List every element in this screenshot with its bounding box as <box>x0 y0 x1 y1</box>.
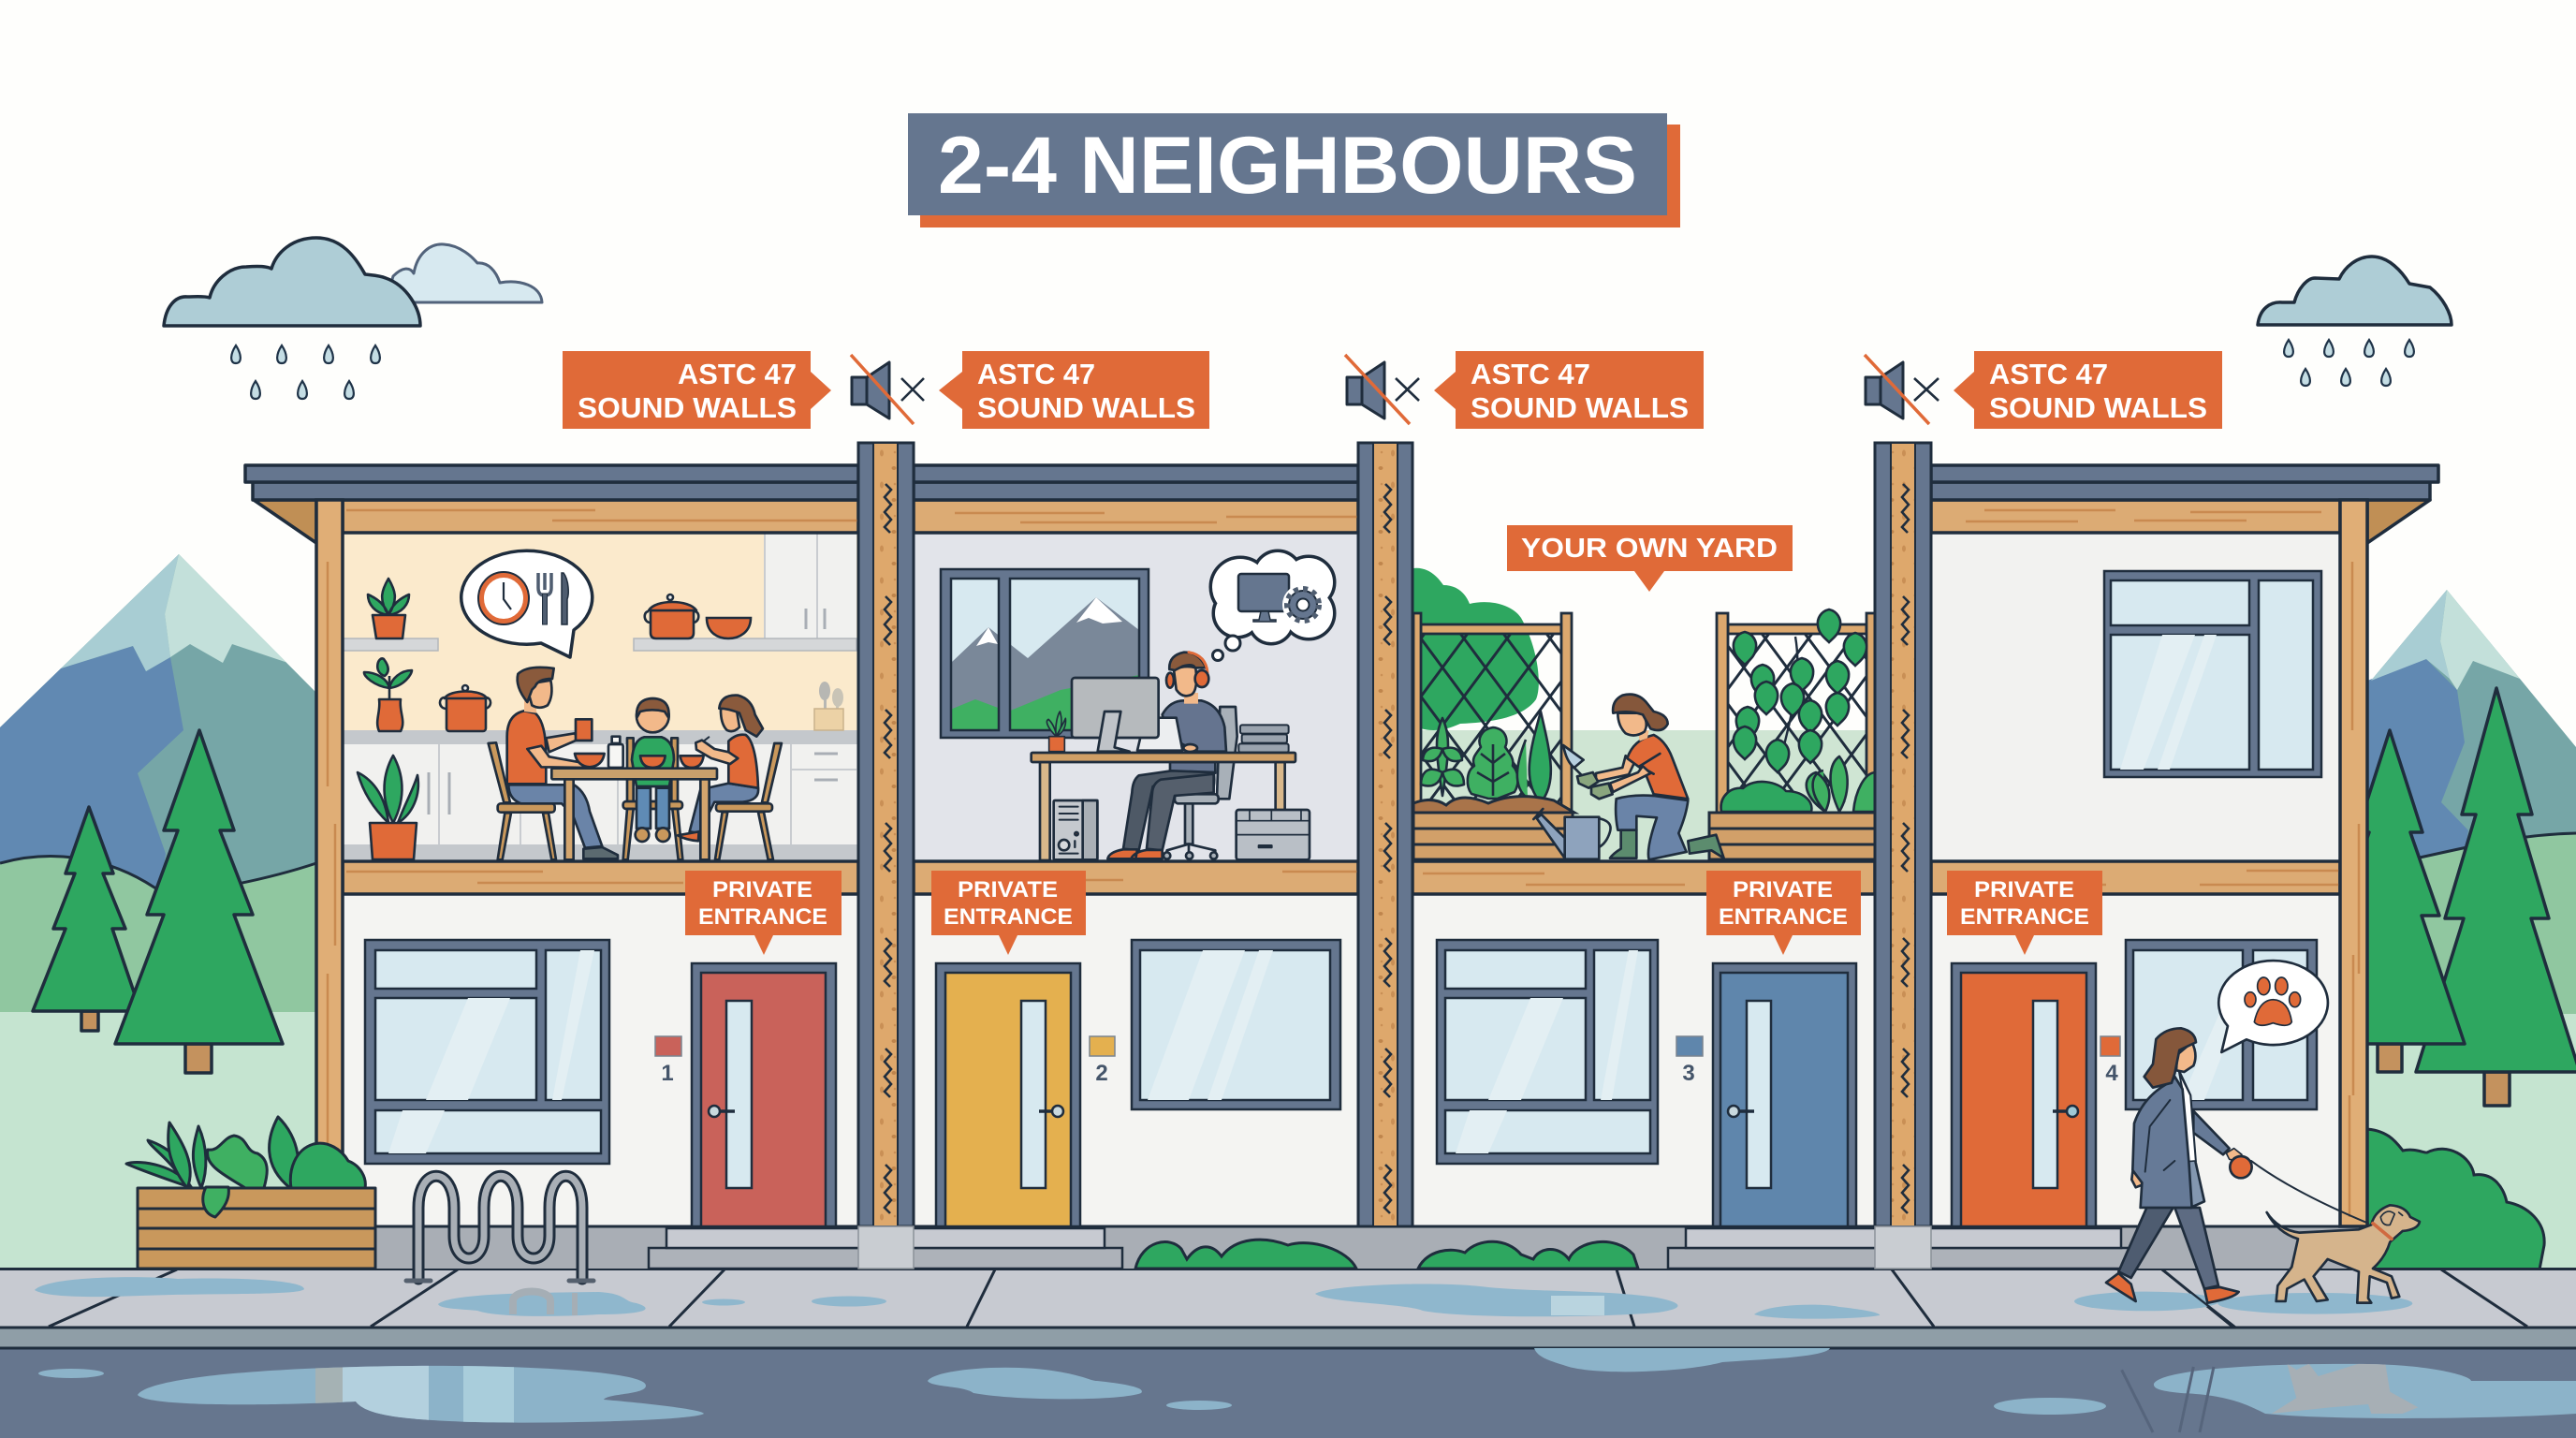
label: your own yard: YOUR OWN YARD <box>1521 534 1778 564</box>
thought bubble: computer and gear <box>1212 552 1333 661</box>
chair: woman <box>715 743 782 859</box>
label: private entrance 1: ENTRANCE <box>698 904 827 930</box>
window: unit 2 ground floor <box>1132 940 1340 1109</box>
unit 4 upper: blank wall with window <box>1931 533 2340 859</box>
monitor <box>1072 678 1159 752</box>
bush: foundation shrub 2 <box>1418 1241 1638 1269</box>
speech bubble: paw <box>2218 961 2328 1052</box>
icon: cooking pot on counter <box>440 685 490 731</box>
landscape: right mountains and hills <box>2364 590 2576 1271</box>
address plate 3: 3 <box>1682 1061 1695 1086</box>
family at table <box>489 668 782 859</box>
window: unit 4 ground floor <box>2126 940 2317 1109</box>
puddle under walker <box>2074 1292 2412 1314</box>
shelf: right <box>634 638 856 651</box>
foundation band <box>375 1226 2364 1269</box>
label: ASTC 47 sound walls, fourth <box>1954 351 2222 429</box>
label: ASTC 47 sound walls, left <box>563 351 831 429</box>
icon: utensil jar <box>814 682 843 730</box>
laptop <box>1137 718 1182 751</box>
shelf: left <box>343 638 438 651</box>
man <box>507 668 618 858</box>
child <box>632 698 674 842</box>
icon: muted speaker 2 <box>1345 355 1419 424</box>
entry steps, units 1 and 2 <box>649 1228 1122 1269</box>
tree: large left <box>115 730 283 1073</box>
kneeling figure <box>1563 695 1724 859</box>
address plate 2: 2 <box>1095 1061 1108 1086</box>
window: unit 1 ground floor <box>365 940 609 1164</box>
icon: pot on shelf <box>645 594 698 638</box>
address plate 3 <box>1676 1036 1703 1086</box>
label: private entrance 1: PRIVATE <box>712 877 812 902</box>
party wall 1 with sound insulation <box>858 443 914 1269</box>
label: ASTC 47 sound walls, left: SOUND WALLS <box>578 391 797 424</box>
label: ASTC 47 sound walls, second: ASTC 47 <box>977 358 1095 390</box>
bike rack <box>406 1176 593 1281</box>
sidewalk joint over puddle <box>2162 1270 2235 1328</box>
speech bubble: meal time <box>461 550 593 657</box>
title banner <box>908 113 1680 227</box>
address plate 4: 4 <box>2105 1061 2118 1086</box>
label: private entrance 3 <box>1706 871 1861 955</box>
torso and head <box>1107 653 1226 858</box>
tree: small left <box>33 807 140 1031</box>
dining table <box>551 769 717 859</box>
label: ASTC 47 sound walls, third: SOUND WALLS <box>1471 391 1689 424</box>
label: private entrance 1 <box>685 871 842 955</box>
ground floor wall <box>343 894 2340 1226</box>
chair <box>1164 707 1237 859</box>
watering can <box>1533 809 1611 859</box>
climbing vine <box>1734 609 1866 772</box>
door: unit 3 blue <box>1713 963 1856 1226</box>
dog <box>2267 1205 2420 1303</box>
label: ASTC 47 sound walls, fourth: ASTC 47 <box>1989 358 2108 390</box>
desk <box>1032 753 1295 860</box>
icon: potted sprout on counter <box>364 658 412 731</box>
raised bed: right <box>1709 813 1876 859</box>
icon: potted plant on shelf <box>368 579 409 638</box>
bowl: man <box>575 754 605 767</box>
woman <box>678 696 763 841</box>
milk bottle <box>608 737 623 768</box>
rain drops: right <box>2284 340 2414 386</box>
trellis: right <box>1717 613 1876 813</box>
address plate 4 <box>2100 1036 2120 1086</box>
label: private entrance 3: ENTRANCE <box>1719 904 1848 930</box>
window with mountain view <box>941 569 1149 738</box>
title banner: 2-4 NEIGHBOURS <box>938 121 1637 211</box>
window: unit 3 ground floor <box>1437 940 1658 1164</box>
address plate 2 <box>1090 1036 1115 1086</box>
party wall 2 with sound insulation <box>1358 443 1412 1226</box>
post: right corner <box>2340 500 2367 1226</box>
icon: floor plant <box>358 756 418 859</box>
unit 3 upper: private yard <box>1412 533 1876 859</box>
landscape: left mountains and hills <box>0 554 318 1274</box>
entry steps, units 3 and 4 <box>1668 1228 2134 1269</box>
address plate 1: 1 <box>661 1061 674 1086</box>
icon: muted speaker 1 <box>851 355 924 424</box>
label: private entrance 4: ENTRANCE <box>1960 904 2089 930</box>
rain drops: left <box>231 345 380 399</box>
door: unit 4 orange <box>1952 963 2096 1226</box>
label: private entrance 4 <box>1947 871 2102 955</box>
label: private entrance 2: PRIVATE <box>958 877 1058 902</box>
label: ASTC 47 sound walls, fourth: SOUND WALLS <box>1989 391 2207 424</box>
clouds: left pair <box>164 238 542 326</box>
label: private entrance 2 <box>931 871 1086 955</box>
trailing vine over planter <box>203 1187 228 1217</box>
icon: muted speaker 3 <box>1865 355 1939 424</box>
tree: large right <box>2416 688 2576 1106</box>
tree: right near post <box>2315 730 2465 1072</box>
address plate 1 <box>655 1036 681 1086</box>
raised bed plants: left <box>1421 712 1551 802</box>
floor beam <box>343 861 2340 894</box>
label: your own yard <box>1507 525 1793 592</box>
desk worker <box>1032 653 1310 860</box>
label: ASTC 47 sound walls, left: ASTC 47 <box>678 358 797 390</box>
label: private entrance 4: PRIVATE <box>1974 877 2074 902</box>
label: private entrance 2: ENTRANCE <box>944 904 1073 930</box>
label: ASTC 47 sound walls, second <box>939 351 1209 429</box>
post: left corner <box>316 500 343 1226</box>
cloud: right <box>2258 257 2452 325</box>
small plant <box>1046 712 1065 752</box>
planter box with greenery <box>126 1117 375 1269</box>
bowl: woman <box>681 756 704 768</box>
icon: bowl on shelf <box>707 618 751 638</box>
chair: man <box>489 742 556 859</box>
storage box <box>1237 810 1310 859</box>
door: unit 1 red <box>692 963 836 1226</box>
gardener with trowel <box>1533 695 1724 859</box>
label: private entrance 3: PRIVATE <box>1733 877 1833 902</box>
street: sidewalk, curb and road <box>0 1269 2576 1438</box>
books <box>1238 725 1289 753</box>
puddles on road <box>38 1348 2576 1432</box>
label: ASTC 47 sound walls, second: SOUND WALLS <box>977 391 1195 424</box>
unit 2 upper: home office <box>914 533 1358 860</box>
raised bed: left <box>1413 797 1574 859</box>
unit 1 upper: kitchen <box>343 533 858 859</box>
label: ASTC 47 sound walls, third <box>1434 351 1704 429</box>
party wall 3 with sound insulation <box>1875 443 1931 1269</box>
computer tower <box>1054 800 1097 859</box>
trellis: left <box>1413 613 1572 813</box>
roof <box>245 465 2438 543</box>
bush behind trellis <box>1412 568 1539 730</box>
label: ASTC 47 sound walls, third: ASTC 47 <box>1471 358 1590 390</box>
puddles on sidewalk <box>35 1277 1880 1319</box>
chair: child <box>623 738 682 859</box>
bush: right of building <box>2364 1129 2544 1269</box>
leash <box>2251 1161 2368 1224</box>
woman <box>2106 1028 2252 1303</box>
raised bed plants: right <box>1721 756 1876 812</box>
bush: foundation shrub 1 <box>1135 1240 1356 1269</box>
woman walking dog <box>2074 961 2420 1328</box>
door: unit 2 yellow <box>936 963 1080 1226</box>
